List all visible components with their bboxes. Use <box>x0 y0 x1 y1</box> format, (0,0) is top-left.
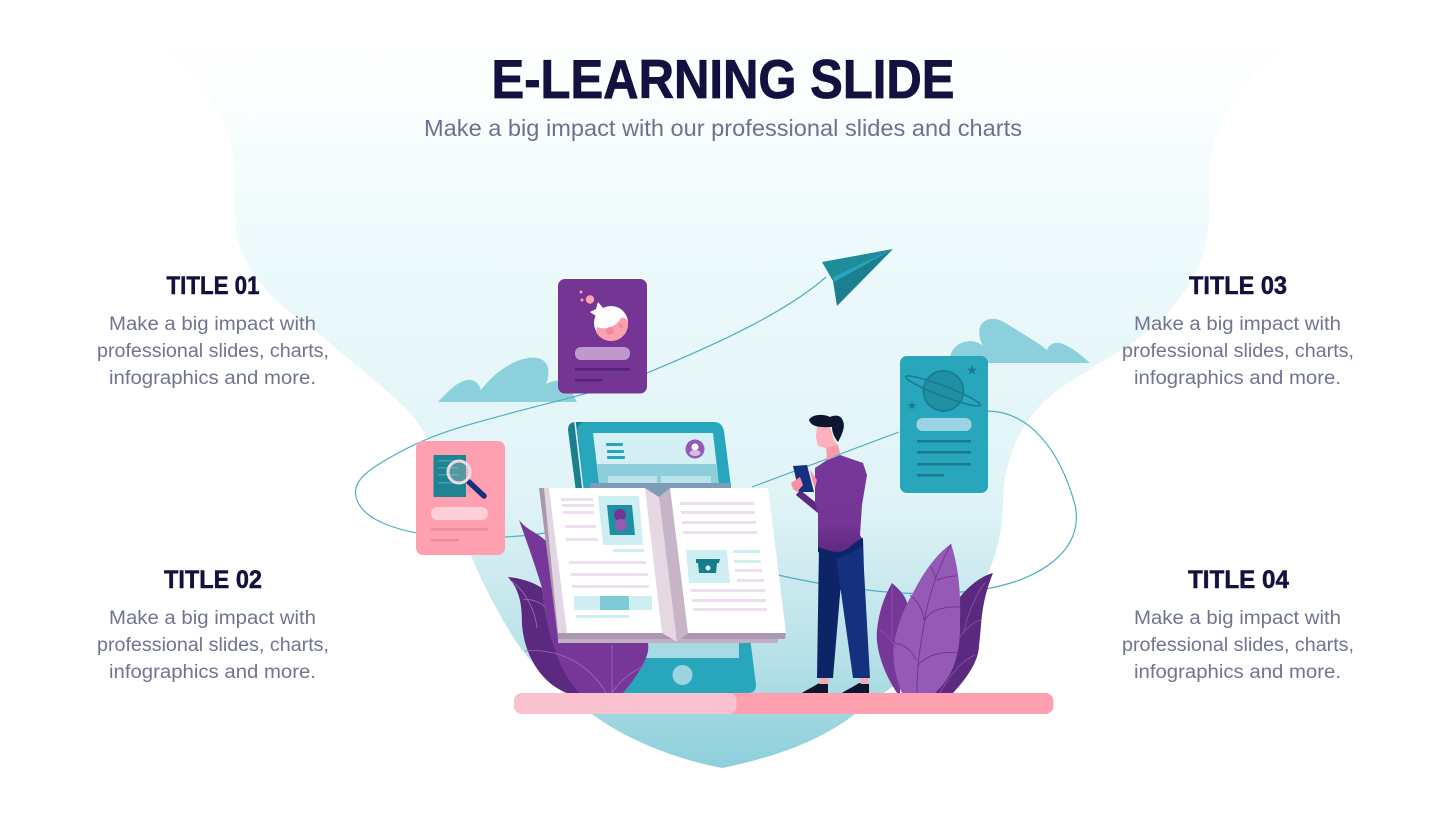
text block: title 04: Make a big impact with <box>1134 608 1341 629</box>
icon: planet <box>904 365 982 411</box>
text block: title 01 <box>97 272 329 389</box>
flight path line <box>355 277 1076 594</box>
icon: flask <box>580 290 628 341</box>
text block: title 03: infographics and more. <box>1134 368 1341 389</box>
plant left <box>508 520 650 693</box>
card: flask <box>558 279 647 394</box>
text block: title 01: infographics and more. <box>109 368 316 389</box>
hand <box>791 470 817 492</box>
sleeve and waistband shadow <box>818 538 863 558</box>
shirt <box>796 455 867 552</box>
text block: title 01: Make a big impact with <box>109 314 316 335</box>
shoes <box>802 683 869 693</box>
ground bar <box>514 693 1054 714</box>
paper plane <box>822 249 893 306</box>
text block: title 03 <box>1122 272 1354 389</box>
text block: title 04: TITLE 04 <box>1188 566 1289 594</box>
text block: title 02: professional slides, charts, <box>97 635 329 656</box>
card: planet <box>900 356 988 493</box>
open book <box>539 488 786 643</box>
neck and face <box>826 445 840 460</box>
icon: document with magnifier <box>434 455 484 497</box>
phone <box>793 465 814 492</box>
tablet <box>568 422 756 693</box>
text block: title 03: TITLE 03 <box>1189 272 1287 300</box>
subtitle: Make a big impact with our professional slides and charts <box>424 115 1022 141</box>
text block: title 04 <box>1122 566 1354 683</box>
text block: title 03: professional slides, charts, <box>1122 341 1354 362</box>
hair <box>809 415 844 442</box>
cloud left <box>438 358 577 402</box>
text block: title 04: infographics and more. <box>1134 662 1341 683</box>
text block: title 02: infographics and more. <box>109 662 316 683</box>
trousers <box>817 545 841 678</box>
card: magnifier <box>416 441 505 555</box>
plant right <box>877 544 993 693</box>
text block: title 04: professional slides, charts, <box>1122 635 1354 656</box>
right page content <box>680 502 767 611</box>
title: E-LEARNING SLIDE <box>492 48 954 110</box>
person <box>791 415 870 693</box>
cloud right <box>950 319 1090 363</box>
text block: title 02: TITLE 02 <box>164 566 262 594</box>
text block: title 01: TITLE 01 <box>166 272 260 300</box>
text block: title 02 <box>97 566 329 683</box>
background blob <box>135 20 1310 768</box>
text block: title 02: Make a big impact with <box>109 608 316 629</box>
text block: title 01: professional slides, charts, <box>97 341 329 362</box>
text block: title 03: Make a big impact with <box>1134 314 1341 335</box>
left page content <box>561 496 652 618</box>
